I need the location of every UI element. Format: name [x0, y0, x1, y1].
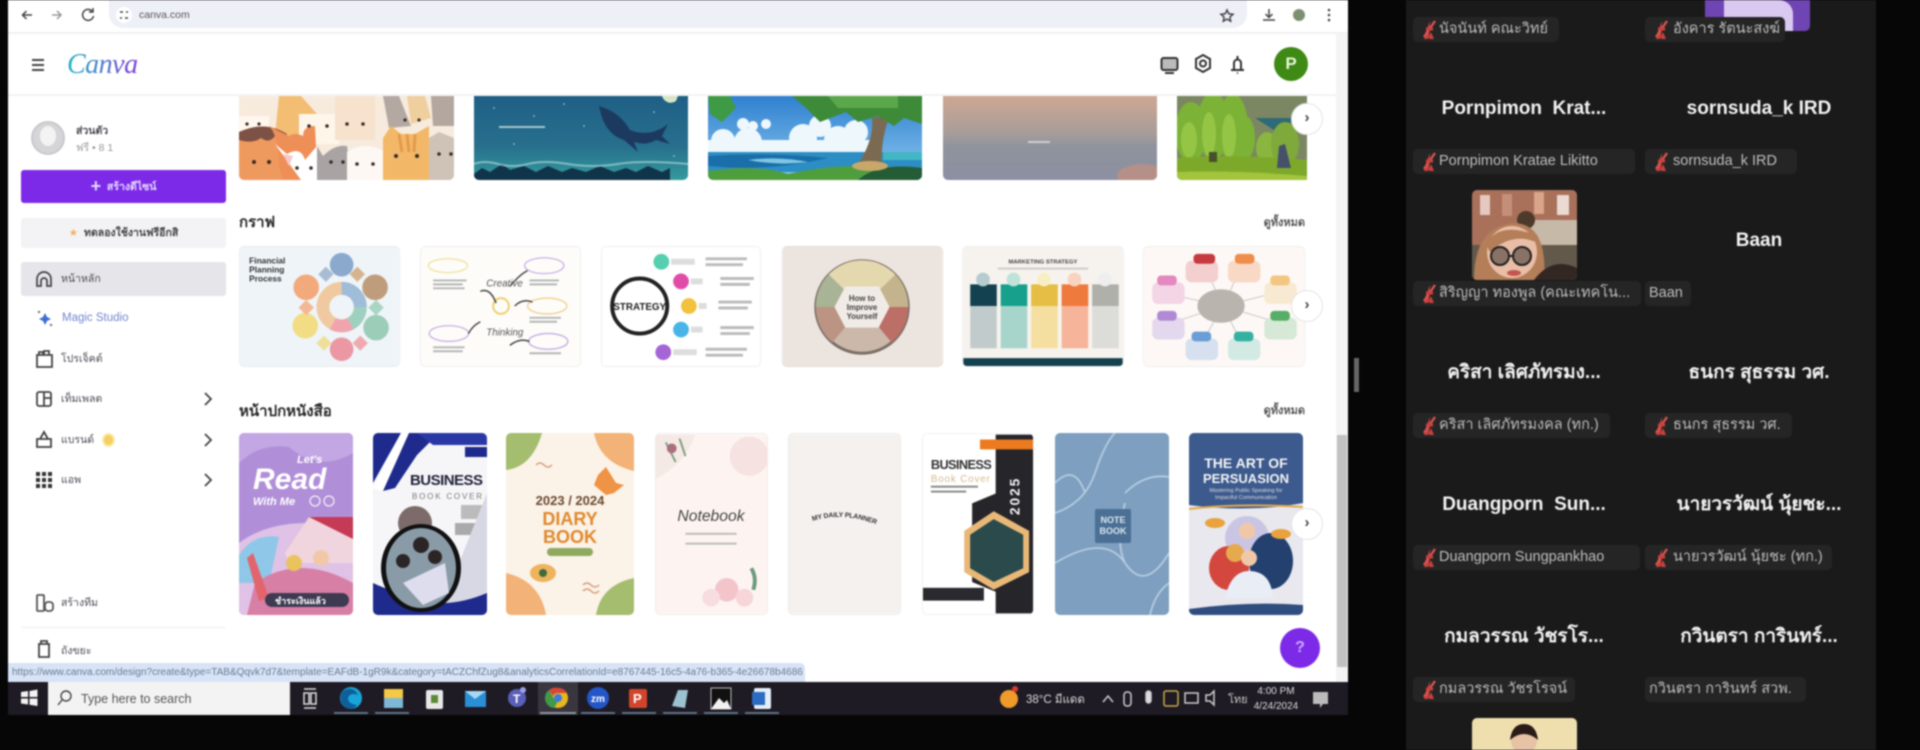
address bar pill	[109, 0, 1247, 28]
book: the art of persuasion: Impactful Communication	[1215, 495, 1277, 501]
label: natchanan	[1413, 17, 1559, 42]
address text: canva.com	[139, 9, 190, 21]
chrome icon	[538, 682, 578, 715]
clock: 4:00 PM	[1257, 686, 1295, 697]
book: lets read with me	[238, 432, 354, 616]
carousel arrow row 3	[1291, 508, 1323, 540]
book: note book blue: BOOK	[1100, 526, 1127, 536]
see all link row 2: ดูทั้งหมด	[1264, 217, 1305, 229]
teams icon	[508, 687, 526, 707]
thumbnail: how to improve yourself	[782, 246, 943, 367]
brand menu item: แบรนด์	[61, 434, 94, 446]
user avatar: P	[1285, 54, 1297, 73]
label: worawat	[1645, 545, 1832, 570]
name: pornpimon: Pornpimon Krat...	[1442, 98, 1606, 119]
name: thanakorn: ธนกร สุธรรม วศ.	[1688, 362, 1830, 383]
hamburger icon	[31, 58, 45, 72]
heading: charts: กราฟ	[239, 214, 275, 231]
windows taskbar	[8, 680, 1348, 716]
file explorer icon	[375, 689, 409, 714]
book: notebook floral: Notebook	[677, 508, 746, 525]
label: sornsuda	[1645, 149, 1797, 174]
label: pornpimon: Pornpimon Kratae Likitto	[1439, 153, 1598, 169]
book: business 2025	[922, 433, 1034, 615]
carousel arrow row 2	[1291, 290, 1323, 322]
book: diary book	[505, 432, 635, 616]
search box	[48, 682, 290, 715]
panel: browser window	[8, 0, 1348, 682]
templates menu item	[35, 390, 213, 408]
apps menu item	[35, 471, 213, 489]
carousel arrow row 1	[1291, 103, 1323, 135]
book: business 2025: BUSINESS	[931, 457, 992, 472]
thumbnail: mind map sketch: Creative	[486, 278, 523, 289]
thumbnail: financial planning chart: Financial	[249, 256, 285, 266]
thumbnail: how to improve yourself: Improve	[847, 303, 878, 312]
label: pornpimon	[1413, 149, 1635, 174]
label: krisa	[1413, 413, 1610, 438]
book: my daily planner: MY DAILY PLANNER	[811, 511, 878, 525]
participant photo bottom	[1471, 717, 1578, 750]
thumbnail: tree and sea	[707, 95, 923, 181]
label: kawintra: กวินตรา การินทร์ สวพ.	[1649, 681, 1792, 697]
notification icon	[1313, 692, 1328, 708]
toolbar icons	[20, 7, 1332, 24]
purple avatar tile	[1705, 0, 1810, 31]
label: thanakorn	[1645, 413, 1792, 438]
thumbnail: mind map sketch	[420, 246, 581, 367]
label: duangporn	[1413, 545, 1640, 570]
create design button: + สร้างดีไซน์	[91, 176, 156, 196]
thumbnail: financial planning chart	[239, 246, 400, 367]
book: lets read with me: Let's	[297, 454, 322, 466]
weather widget	[1000, 686, 1085, 708]
label: natchanan: นัจนันท์ คณะวิทย์	[1439, 21, 1548, 37]
thumbnail: marketing strategy: STRATEGY	[613, 302, 667, 313]
magic studio menu item	[37, 310, 129, 327]
thumbnail: willow trees	[1176, 95, 1308, 181]
status url bar: https://www.canva.com/design?create&type=TAB&Qqvk7d7&template=EAFdB-1gR9k&category=tACZChfZug8&analyticsCorrelationId=e8767445-16c5-4a76-b365-4e26678b4686	[12, 667, 803, 678]
book: business book cover blue	[372, 432, 488, 616]
sidebar	[20, 120, 227, 659]
create design button	[21, 170, 226, 203]
book: lets read with me: Read	[253, 463, 327, 496]
name: duangporn: Duangporn Sun...	[1442, 494, 1606, 515]
home menu item: หน้าหลัก	[61, 273, 101, 285]
label: sirinya: สิริญญา ทองพูล (คณะเทคโน...	[1439, 285, 1630, 301]
name: sornsuda: sornsuda_k IRD	[1687, 98, 1831, 119]
canva logo: Canva	[67, 49, 138, 80]
clock	[1254, 686, 1299, 712]
thumbnail: how to improve yourself: How to	[849, 294, 875, 303]
content area	[238, 95, 1323, 669]
book: business book cover blue: BOOK COVER	[412, 492, 482, 501]
book: business 2025: 2025	[1007, 477, 1022, 515]
label: angkhan	[1645, 17, 1785, 42]
book: my daily planner	[788, 433, 901, 615]
carousel arrow row 1: ›	[1304, 109, 1310, 126]
book: diary book: 2023 / 2024	[536, 493, 605, 508]
name: krisa: คริสา เลิศภัทรมง...	[1447, 362, 1601, 383]
thumbnail: circle mind map	[1143, 246, 1305, 367]
system tray icons: โทย	[1228, 692, 1248, 706]
book: the art of persuasion: PERSUASION	[1203, 471, 1289, 486]
outer scrollbar handle	[1354, 358, 1359, 392]
see all link row 3: ดูทั้งหมด	[1264, 405, 1305, 417]
header icons	[1160, 53, 1245, 75]
name: baan: Baan	[1736, 230, 1782, 251]
thumbnail: whale	[472, 95, 689, 182]
powerpoint icon	[622, 689, 656, 714]
label: kamonwan: กมลวรรณ วัชรโรจน์	[1439, 681, 1567, 697]
carousel arrow row 3: ›	[1304, 514, 1310, 531]
canva header	[8, 34, 1348, 96]
start icon	[21, 690, 38, 706]
powerpoint icon: P	[633, 691, 642, 706]
task view icon	[304, 689, 316, 708]
book: the art of persuasion: Mastering Public Speaking for	[1209, 488, 1283, 494]
trash item: ถังขยะ	[61, 645, 91, 657]
clock: 4/24/2024	[1254, 701, 1299, 712]
system tray icons	[1103, 691, 1248, 706]
magic studio menu item: Magic Studio	[62, 312, 128, 324]
search box: Type here to search	[81, 692, 192, 706]
free trial button: ★ ทดลองใช้งานฟรีอีกสิ	[69, 227, 178, 239]
name: worawat: นายวรวัฒน์ นุ้ยชะ...	[1677, 494, 1841, 515]
label: sirinya	[1413, 281, 1641, 306]
carousel arrow row 2: ›	[1304, 296, 1310, 313]
label: worawat: นายวรวัฒน์ นุ้ยชะ (ทก.)	[1673, 549, 1823, 565]
heading: book covers: หน้าปกหนังสือ	[239, 403, 332, 420]
projects menu item: โปรเจ็คต์	[61, 353, 103, 365]
thumbnail: marketing strategy	[601, 246, 761, 367]
book: note book blue: NOTE	[1100, 515, 1126, 525]
account plan: ฟรี • 8 1	[76, 142, 113, 154]
book: lets read with me: With Me	[253, 496, 295, 508]
account name: ส่วนตัว	[76, 125, 108, 137]
notepad icon	[663, 690, 697, 714]
book: business 2025: Book Cover	[931, 474, 991, 485]
help button	[1280, 628, 1320, 668]
label: duangporn: Duangporn Sungpankhao	[1439, 549, 1604, 565]
panel: zoom participants	[1406, 0, 1876, 750]
create team item: สร้างทีม	[61, 597, 98, 609]
trash item	[21, 627, 226, 663]
thumbnail: financial planning chart: Process	[249, 273, 282, 283]
label: baan: Baan	[1649, 285, 1683, 301]
apps menu item: แอพ	[61, 474, 81, 486]
thumbnail: cats	[238, 95, 455, 181]
word icon	[745, 688, 779, 714]
edge icon	[334, 687, 368, 714]
thumbnail: sunset sea	[942, 95, 1158, 181]
label: sornsuda: sornsuda_k IRD	[1673, 153, 1777, 169]
name: kamonwan: กมลวรรณ วัชรโร...	[1444, 626, 1604, 647]
help button: ?	[1295, 639, 1305, 656]
label: krisa: คริสา เลิศภัทรมงคล (ทก.)	[1439, 417, 1599, 433]
templates menu item: เท็มเพลต	[61, 393, 102, 405]
projects menu item	[35, 349, 103, 369]
free trial button	[21, 218, 226, 248]
label: kamonwan	[1413, 677, 1575, 702]
thumbnail: marketing strategy columns: MARKETING STRATEGY	[1009, 260, 1078, 266]
page scrollbar	[1336, 34, 1348, 682]
thumbnail: how to improve yourself: Yourself	[847, 312, 878, 321]
thumbnail: mind map sketch: Thinking	[486, 328, 524, 339]
home menu item	[21, 262, 226, 296]
label: angkhan: อังคาร รัตนะสงฆ์	[1673, 21, 1780, 37]
book: diary book: DIARY	[542, 509, 598, 529]
store icon	[426, 690, 443, 709]
zoom icon: zm	[591, 694, 605, 705]
account avatar	[31, 121, 65, 155]
weather widget: 38°C มีแดด	[1026, 693, 1085, 706]
book: the art of persuasion: THE ART OF	[1204, 455, 1288, 471]
thumbnail: marketing strategy columns	[962, 246, 1124, 367]
label: thanakorn: ธนกร สุธรรม วศ.	[1673, 417, 1781, 433]
browser address toolbar	[8, 0, 1348, 34]
label: baan	[1645, 281, 1691, 306]
book: lets read with me: ชำระเงินแล้ว	[275, 596, 326, 606]
book: note book blue	[1054, 432, 1170, 616]
book: diary book: BOOK	[543, 527, 597, 547]
participant photo woman with glasses	[1471, 189, 1578, 281]
brand menu item	[35, 430, 213, 449]
thumbnail: financial planning chart: Planning	[249, 265, 284, 275]
mail icon	[465, 691, 486, 707]
create team item	[35, 593, 98, 613]
label: kawintra	[1645, 677, 1806, 702]
teams icon: T	[513, 692, 521, 706]
name: kawintra: กวินตรา การินทร์...	[1680, 626, 1838, 647]
zoom icon	[581, 687, 615, 714]
user avatar	[1274, 47, 1308, 81]
book: business book cover blue: BUSINESS	[410, 472, 483, 489]
book: the art of persuasion	[1188, 432, 1304, 616]
book: notebook floral	[655, 433, 768, 615]
status url bar	[8, 663, 805, 682]
photos icon	[704, 688, 738, 714]
